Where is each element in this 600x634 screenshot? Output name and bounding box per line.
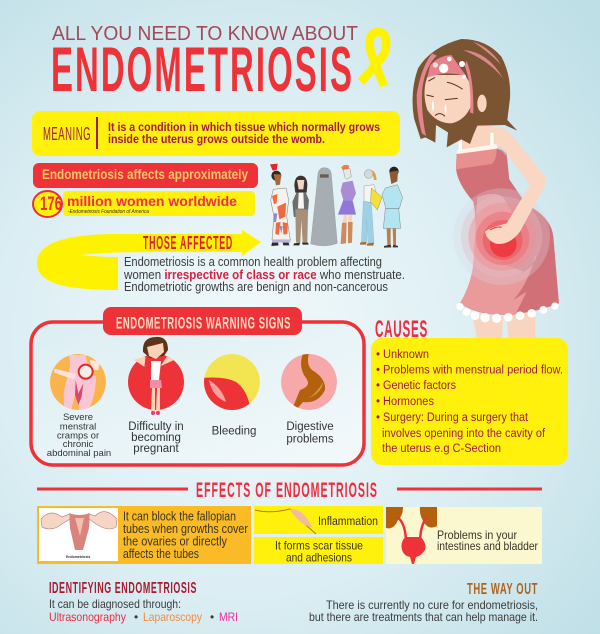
text: diagnostic methods: Laparoscopy [143, 610, 202, 624]
text: the way out description: There is currently no cure for endometriosis, [326, 598, 538, 612]
text: those affected description: Endometriotic growths are benign and non-cancerous [124, 280, 388, 294]
heading: meaning: MEANING [43, 124, 91, 144]
text: difficulty in becoming pregnant: becoming [131, 432, 181, 444]
panel: 176 million women worldwide: -Endometriosis Foundation of America [68, 209, 149, 215]
text: diagnostic methods: MRI [219, 610, 238, 624]
panel: intestines and bladder: intestines and bladder [437, 539, 538, 553]
text: severe cramps: abdominal pain [47, 448, 111, 459]
text: difficulty in becoming pregnant: Difficulty in [128, 421, 184, 433]
icon: uterus diagram [41, 512, 117, 559]
woman in purple outfit [338, 165, 356, 244]
text: diagnostic methods: • [210, 610, 214, 624]
woman in light blue dress [382, 167, 403, 248]
panel: scar tissue: and adhesions [286, 550, 352, 564]
panel: 176 million women worldwide: 176 [40, 194, 62, 215]
section: identifying endometriosis [49, 580, 238, 624]
panel: 176 million women worldwide: million women worldwide [67, 193, 237, 209]
heading: effects of endometriosis: EFFECTS OF ENDOMETRIOSIS [196, 479, 378, 502]
icon: uterus diagram: Endometriosis [66, 555, 90, 559]
panel: intestines and bladder [386, 507, 542, 564]
pain rings [453, 188, 550, 285]
text: the way out description: but there are treatments that can help manage it. [309, 610, 538, 624]
text: those affected description: women irrespective of class or race who menstruate. [123, 268, 405, 282]
panel: affects approximately: Endometriosis affects approximately [42, 167, 248, 182]
panel: causes: the uterus e.g C-Section [382, 443, 501, 455]
title: all you need to know about: ALL YOU NEED TO KNOW ABOUT [52, 23, 358, 45]
panel: affects approximately [33, 163, 258, 188]
panel: causes: • [376, 380, 380, 392]
panel: fallopian tubes effect: affects the tubes [123, 547, 199, 561]
heading: identifying endometriosis: IDENTIFYING ENDOMETRIOSIS [49, 580, 197, 597]
panel: intestines and bladder: Problems in your [437, 528, 517, 542]
text: difficulty in becoming pregnant: pregnant [133, 443, 180, 455]
text: THOSE AFFECTED [143, 233, 233, 253]
panel: causes: • [376, 349, 380, 361]
text: bleeding: Bleeding [212, 426, 256, 438]
text: diagnostic methods: • [134, 610, 138, 624]
body and dress [453, 117, 559, 338]
text: severe cramps: menstral [60, 422, 96, 432]
text: digestive problems: Digestive [286, 421, 334, 433]
text: difficulty in becoming pregnant [128, 421, 184, 455]
panel: warning signs [31, 307, 364, 465]
section: the way out [309, 581, 538, 624]
woman with glasses and yellow folder [360, 170, 382, 246]
hem [456, 302, 559, 323]
panel: causes: Hormones [383, 396, 434, 408]
panel: inflammation: Inflammation [318, 516, 378, 528]
text: digestive problems: problems [286, 434, 334, 446]
woman in grey jacket [293, 176, 309, 245]
text: severe cramps: cramps or [57, 430, 99, 442]
text: meaning definition: It is a condition in which tissue which normally grows [108, 122, 380, 134]
icon: yellow ribbon [361, 32, 386, 86]
panel: causes: • [376, 364, 380, 376]
panel: causes: Surgery: During a surgery that [383, 412, 529, 424]
panel: fallopian tubes effect [37, 506, 251, 564]
text: severe cramps [47, 412, 111, 459]
panel: causes: • [376, 396, 380, 408]
heading: the way out: THE WAY OUT [467, 581, 538, 598]
text: digestive problems [286, 421, 334, 446]
head and hair [413, 39, 517, 147]
text: the way out description [309, 598, 538, 624]
text: meaning definition [108, 122, 380, 146]
text: diagnostic methods [49, 610, 238, 624]
text: severe cramps: Severe [63, 412, 93, 423]
text: CAUSES [375, 316, 428, 343]
panel: meaning [32, 111, 400, 156]
panel: causes: involves opening into the cavity of [382, 428, 546, 440]
heading: warning signs: ENDOMETRIOSIS WARNING SIGNS [116, 314, 291, 332]
panel: scar tissue: It forms scar tissue [275, 538, 363, 552]
panel: causes: • [376, 412, 380, 424]
panel: inflammation [254, 506, 383, 534]
icon: girl thinking [128, 337, 184, 415]
panel: scar tissue [254, 537, 383, 564]
text: those affected description: Endometriosis is a common health problem affecting [124, 255, 382, 269]
neck and shoulder [458, 117, 497, 151]
text: diagnosed through: It can be diagnosed through: [49, 597, 181, 611]
panel: causes: Genetic factors [383, 380, 456, 392]
text: those affected description [123, 255, 405, 294]
arm [485, 127, 545, 244]
icon: kidneys and bladder [386, 507, 437, 564]
text: severe cramps: chronic [63, 439, 94, 450]
legs [472, 310, 535, 338]
panel: causes [371, 338, 568, 465]
panel: fallopian tubes effect: tubes when growths cover [123, 522, 248, 536]
illustration: group of diverse women [270, 164, 403, 248]
panel: causes: Problems with menstrual period flow. [383, 364, 563, 376]
panel: 176 million women worldwide [33, 191, 255, 217]
icon: digestive problems [281, 353, 337, 410]
icon: abdominal pain [50, 354, 106, 412]
text: meaning definition: inside the uterus grows outside the womb. [108, 134, 325, 146]
text: diagnostic methods: Ultrasonography [49, 610, 126, 624]
woman in patterned dress [270, 164, 291, 246]
icon: bleeding [200, 354, 260, 412]
dress [456, 133, 559, 315]
panel: causes: Unknown [383, 349, 429, 361]
arrow: those affected [37, 230, 261, 290]
illustration: crying woman holding abdomen [413, 39, 559, 338]
woman in burqa [311, 168, 337, 246]
panel: fallopian tubes effect: the ovaries or directly [123, 534, 228, 548]
panel: fallopian tubes effect: It can block the fallopian [123, 510, 236, 524]
